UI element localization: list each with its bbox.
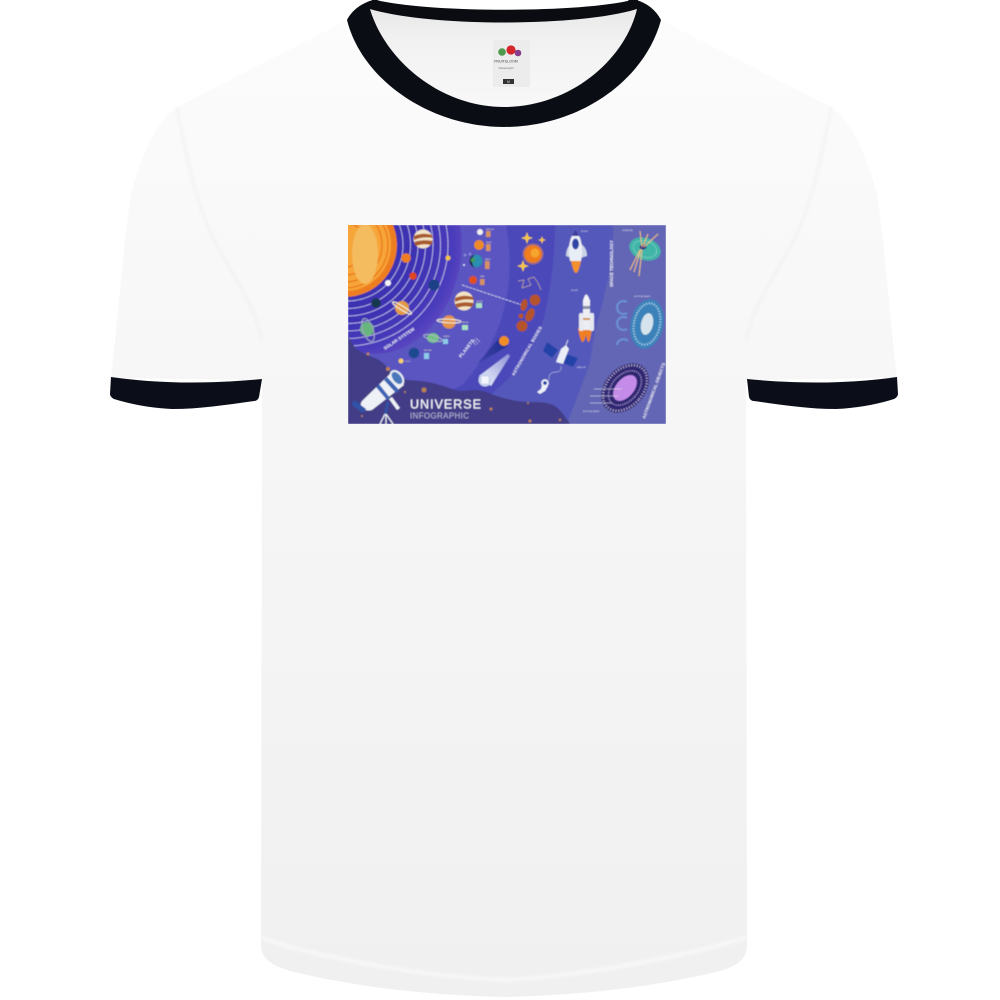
orbit rings (348, 225, 450, 347)
planet: jupiter striped (414, 230, 433, 248)
right sleeve cuff (747, 377, 898, 409)
pluto (398, 358, 404, 364)
dashed divider (462, 285, 522, 305)
heading: solar system: SOLAR SYSTEM (383, 326, 416, 351)
planet labels: VENUS (486, 242, 492, 244)
galaxy pointer lines (590, 389, 622, 403)
panel: space technology (537, 229, 594, 394)
size tag: M (507, 80, 510, 84)
meteor with tail (477, 336, 509, 364)
saturn (437, 315, 461, 329)
planets list lines (472, 338, 480, 345)
weight text: Valueweight (498, 66, 514, 70)
printed infographic panel (348, 225, 666, 424)
subtitle: infographic: INFOGRAPHIC (410, 412, 469, 420)
astronaut (537, 366, 561, 394)
planet label bars (480, 231, 490, 285)
large rocket (578, 294, 594, 342)
uranus (423, 333, 443, 343)
planet labels: URANUS (443, 335, 450, 338)
brand logo fruit (498, 45, 521, 56)
star large (521, 232, 533, 244)
heading: planets: PLANETS (458, 338, 475, 359)
label: elliptical galaxy: ELLIPTICAL GALAXY (634, 295, 651, 298)
venus (474, 240, 484, 250)
brand name: FRUIT&LOOM (494, 60, 518, 64)
planet: dark blue (428, 280, 440, 290)
label: big rocket: ROCKET (571, 290, 578, 292)
planet labels: MARS (480, 275, 485, 278)
gauge charts (617, 301, 628, 345)
panel: planets (398, 229, 495, 364)
planet labels: JUPITER (476, 301, 483, 303)
planet labels (405, 229, 495, 363)
asteroids (516, 294, 540, 332)
back collar band (370, 0, 638, 22)
star small (538, 236, 546, 244)
elliptical galaxy blue (626, 296, 668, 352)
spiral galaxy purple (591, 354, 659, 422)
planet labels: PLUTO (405, 361, 411, 363)
dark hill (348, 337, 570, 424)
telescope (352, 367, 407, 424)
left sleeve cuff (110, 377, 262, 409)
heading: space technology: SPACE TECHNOLOGY (609, 240, 614, 287)
supernova (626, 231, 664, 276)
neck label (493, 40, 530, 87)
mercury (477, 229, 483, 235)
planet labels: NEPTUNE (424, 350, 432, 352)
heading: astronomical objects: ASTRONOMICAL OBJECTS (641, 362, 666, 419)
planet: ringed orange (392, 300, 412, 316)
planet: ringed green (359, 317, 377, 343)
headings (383, 240, 666, 419)
jupiter (454, 292, 474, 310)
panel: astronomical bodies (477, 232, 546, 386)
satellite (543, 340, 578, 367)
planet label bars pale (462, 303, 482, 330)
front collar ribbing (347, 0, 661, 127)
planet: white (385, 280, 391, 286)
planet: dark teal (371, 298, 381, 308)
title: universe: UNIVERSE (410, 398, 481, 412)
planet labels: EARTH (485, 258, 491, 261)
constellation (518, 277, 541, 290)
inner neck (370, 9, 637, 107)
planet labels: SATURN (462, 321, 469, 324)
sun (348, 225, 398, 298)
star sun (522, 244, 544, 264)
planet: red (409, 272, 417, 280)
planet labels: MERCURY (486, 229, 495, 231)
star lower (517, 260, 529, 272)
panel: astronomical objects (583, 229, 668, 422)
comet white (478, 354, 510, 386)
heading: astronomical bodies: ASTRONOMICAL BODIES (511, 325, 543, 376)
label: spiral galaxy: ELLIPTICAL GALAXY (583, 410, 600, 413)
hill stars (361, 352, 561, 422)
neptune (409, 348, 419, 358)
planet: yellow (446, 256, 450, 260)
title (410, 398, 481, 420)
label: supernova: SUPERNOVA (622, 229, 633, 232)
panel: solar system (348, 225, 452, 347)
earth (463, 253, 483, 268)
planet: orange (401, 253, 411, 263)
mars (469, 276, 477, 284)
label: satellite: SATELLITE (577, 366, 587, 369)
small rocket (566, 229, 587, 273)
t-shirt body (111, 20, 897, 997)
planet label bars blue (424, 339, 448, 359)
label: rocket: ROCKET (581, 231, 588, 233)
